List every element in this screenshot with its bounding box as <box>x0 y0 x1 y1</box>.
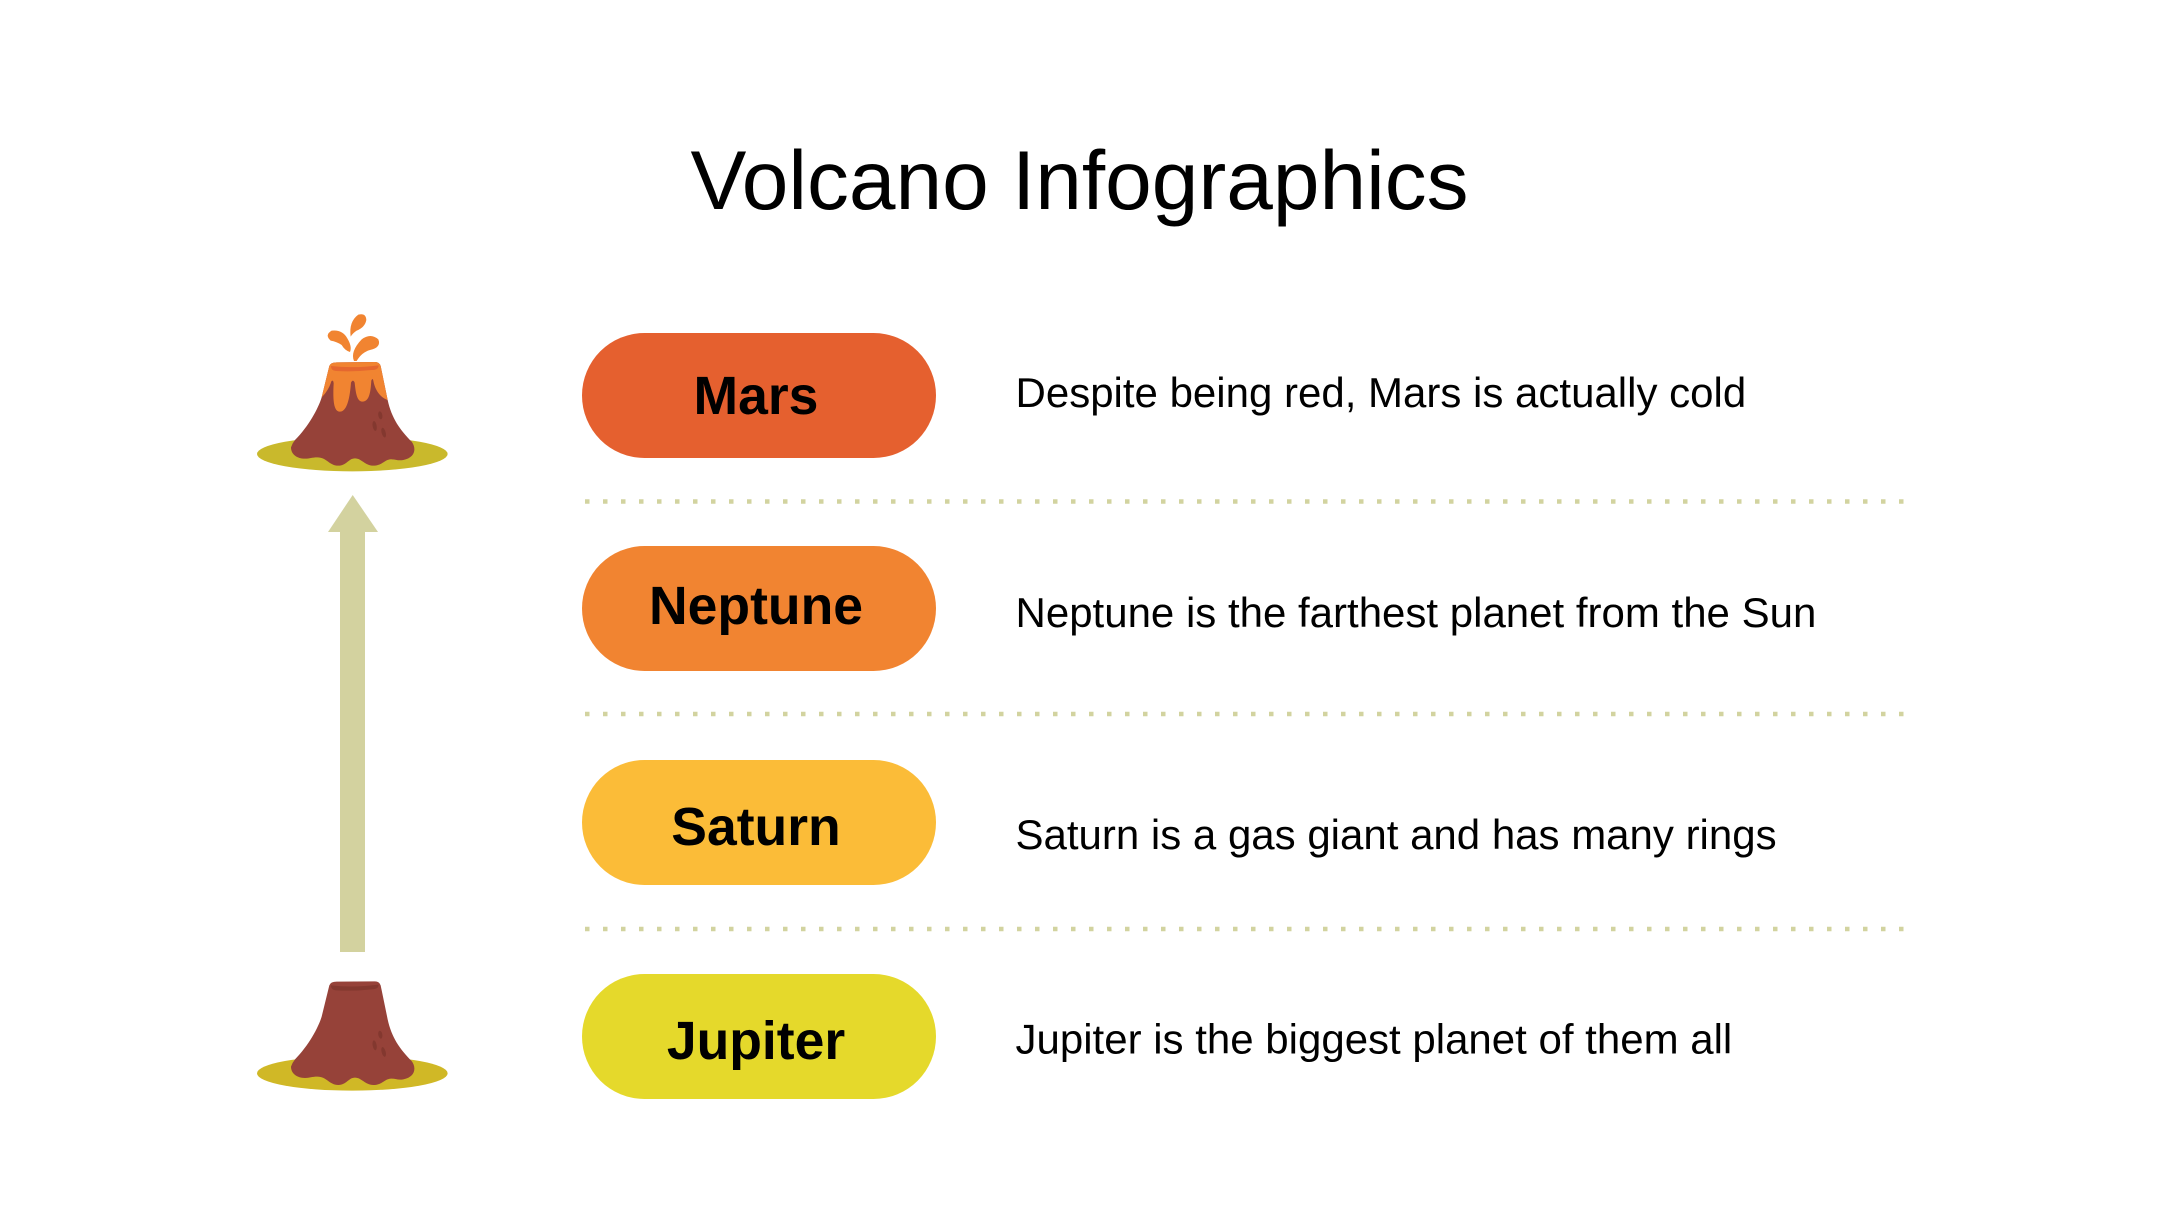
pill: Mars <box>582 333 936 458</box>
pill: Neptune <box>582 546 936 671</box>
pill: Neptune: Neptune <box>649 577 863 636</box>
icon: dormant volcano <box>257 981 448 1091</box>
pill: Mars: Mars <box>694 367 818 426</box>
pill: Saturn <box>582 760 936 885</box>
icon: erupting volcano <box>257 314 448 471</box>
description: Mars: Despite being red, Mars is actually cold <box>1016 369 1746 416</box>
title: Volcano Infographics <box>690 133 1468 227</box>
pill: Saturn: Saturn <box>671 798 841 857</box>
arrow <box>328 495 378 952</box>
description: Neptune: Neptune is the farthest planet from the Sun <box>1016 589 1816 636</box>
description: Saturn: Saturn is a gas giant and has many rings <box>1016 811 1777 858</box>
pill: Jupiter <box>582 974 936 1099</box>
description: Jupiter: Jupiter is the biggest planet of them all <box>1016 1016 1732 1062</box>
pill: Jupiter: Jupiter <box>667 1012 845 1071</box>
